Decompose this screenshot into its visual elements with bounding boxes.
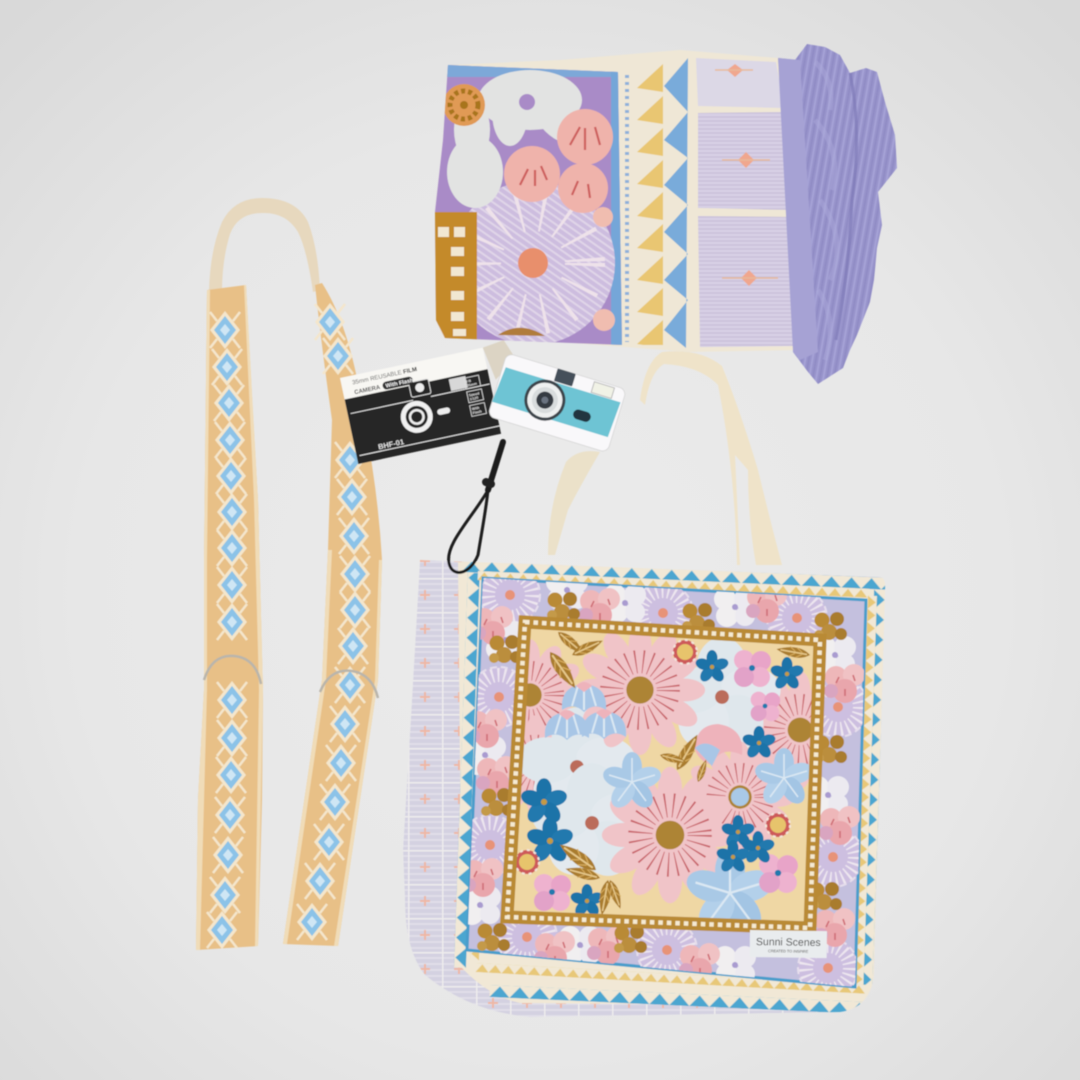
brand label: Sunni Scenes	[756, 936, 821, 949]
panel gold clusters	[477, 592, 847, 953]
blanket large lavender flower	[469, 185, 616, 342]
tote body	[403, 560, 818, 1016]
blanket fringe	[778, 44, 897, 384]
camera box	[339, 338, 530, 464]
strap left length	[196, 285, 263, 950]
strap right length	[283, 283, 382, 946]
camera wrist strap	[449, 442, 503, 572]
tote gold frame centre	[500, 614, 828, 933]
camera flash	[591, 382, 614, 398]
tote cream field	[458, 562, 885, 1006]
blanket body	[435, 50, 800, 352]
tote bag	[403, 560, 886, 1017]
handle: left strand	[548, 451, 600, 555]
box text: BHF-01	[377, 437, 405, 451]
reusable camera	[488, 353, 627, 453]
strap top loop	[209, 198, 320, 292]
panel pink clusters	[462, 584, 865, 982]
blanket floral panel	[430, 60, 625, 350]
camera strap	[196, 198, 382, 950]
camera button	[572, 408, 592, 423]
box spec tags	[464, 375, 487, 416]
camera box: F/8	[466, 379, 471, 384]
gold dotted frame	[507, 622, 820, 928]
camera viewfinder	[554, 368, 576, 386]
tote floral panel	[459, 565, 868, 998]
box lens	[398, 398, 436, 436]
centre leaves	[545, 628, 811, 916]
strap buckle rings	[204, 656, 378, 698]
centre dark-blue flowers	[519, 650, 805, 918]
box text: With Flash	[385, 378, 415, 390]
camera box: Flash	[472, 409, 482, 415]
centre large pink daisies	[575, 625, 796, 903]
camera box: Speed	[469, 391, 480, 398]
centre pink flowers	[534, 650, 798, 911]
handle: right loop	[640, 351, 782, 565]
camera box: With	[471, 406, 480, 411]
box text: CAMERA	[354, 385, 382, 396]
box viewfinder	[409, 379, 431, 398]
box text	[352, 367, 432, 454]
blanket fringe header	[778, 58, 818, 360]
centre partial daisies	[520, 639, 812, 810]
blanket	[430, 44, 897, 384]
camera teal band	[492, 366, 621, 438]
blanket gold flower	[443, 84, 485, 126]
camera box: 35mm	[466, 382, 477, 388]
blanket triangle band	[627, 58, 688, 348]
brand label	[750, 930, 827, 958]
blanket lavender panels	[696, 58, 798, 347]
tote handles	[548, 351, 782, 565]
panel lavender daisies	[460, 565, 868, 998]
product flat lay	[196, 44, 897, 1017]
brand label: CREATED TO INSPIRE	[768, 949, 809, 954]
panel white blobs	[459, 571, 856, 985]
centre light-blue flowers	[545, 682, 816, 938]
box text: 35mm REUSABLE FILM	[352, 367, 418, 386]
camera lens	[520, 375, 570, 425]
blanket gold block	[433, 212, 477, 342]
tote yellow triangle border	[470, 571, 877, 994]
tote blue triangle border	[454, 560, 886, 1014]
centre ring flowers	[515, 640, 790, 874]
blanket pink shells	[504, 109, 615, 331]
centre white flowers	[517, 637, 781, 876]
blanket white flower	[447, 70, 582, 208]
box flap	[482, 338, 519, 381]
camera box: 1/120	[469, 396, 479, 401]
